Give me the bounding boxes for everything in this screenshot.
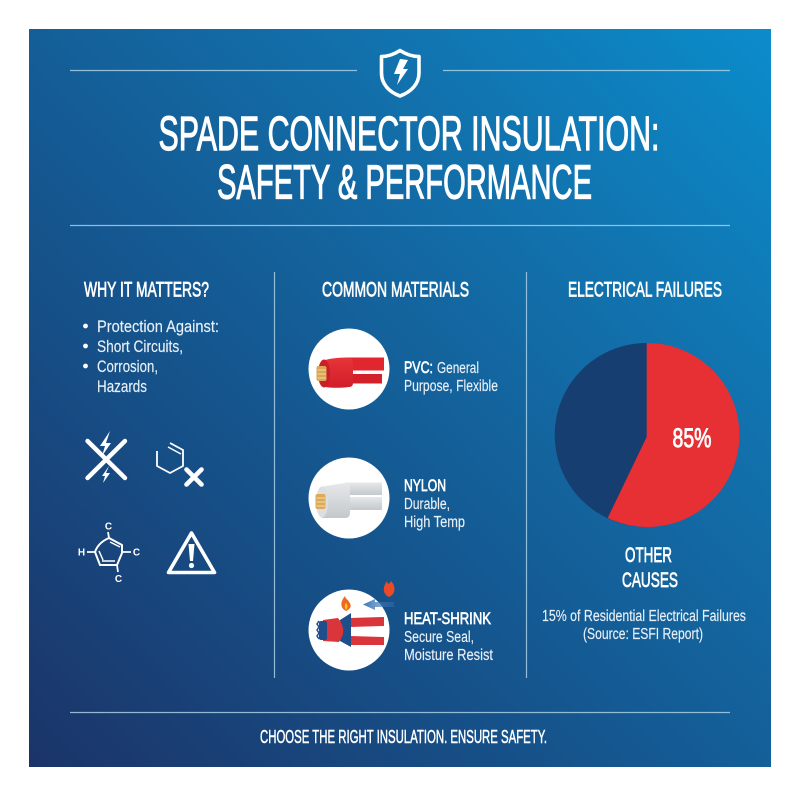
- icon: chemical ring: C: [105, 522, 112, 532]
- label: heat-shrink: Moisture Resist: [404, 647, 494, 664]
- icon: chemical ring: H: [78, 548, 85, 558]
- label: other causes: CAUSES: [622, 569, 678, 592]
- source note: 15% of Residential Electrical Failures: [542, 608, 746, 625]
- icon: warning triangle: [168, 533, 214, 572]
- label: nylon: Durable,: [404, 496, 450, 513]
- source note: (Source: ESFI Report): [583, 626, 703, 643]
- label: other causes: OTHER: [625, 544, 672, 567]
- icon: heat-shrink connector: [308, 590, 390, 670]
- icon: chemical ring: [78, 522, 140, 585]
- icon: shield with lightning bolt: [382, 50, 419, 96]
- material: nylon: [308, 458, 465, 538]
- label: heat-shrink: [404, 609, 494, 664]
- bullet list: protection: [83, 318, 219, 396]
- icon: flame on connector: [341, 596, 351, 611]
- label: nylon: NYLON: [404, 476, 446, 495]
- icon: flame and arrow: [363, 581, 395, 610]
- bullet list: protection: Corrosion,: [97, 358, 158, 376]
- heading: common materials: COMMON MATERIALS: [322, 278, 469, 302]
- icon: corrosion molecule with cross: [157, 443, 202, 484]
- icon: no short circuit: [88, 431, 125, 483]
- footer tagline: CHOOSE THE RIGHT INSULATION. ENSURE SAFETY.: [260, 726, 547, 747]
- bullet list: protection: Short Circuits,: [97, 338, 183, 356]
- label: other causes: [622, 544, 678, 592]
- pie chart: [555, 343, 739, 527]
- bullet list: protection: Protection Against:: [97, 318, 219, 336]
- label: heat-shrink: Secure Seal,: [404, 629, 474, 646]
- title: [158, 108, 660, 210]
- material: PVC: [308, 328, 498, 410]
- label: PVC: PVC:: [404, 358, 433, 377]
- label: nylon: [404, 476, 465, 531]
- icon: PVC connector: [308, 328, 390, 410]
- panel: electrical failures: [542, 278, 746, 643]
- heading: electrical failures: ELECTRICAL FAILURES: [568, 278, 722, 302]
- label: heat-shrink: HEAT-SHRINK: [404, 609, 491, 628]
- label: PVC: [404, 358, 498, 395]
- source note: [542, 608, 746, 643]
- label: PVC: Purpose, Flexible: [404, 378, 498, 395]
- icon: nylon connector: [308, 458, 390, 538]
- material: heat-shrink: [308, 581, 494, 670]
- pie chart: 85%: [672, 423, 712, 453]
- icon: chemical ring: C: [115, 574, 122, 585]
- panel: why it matters: [78, 278, 219, 585]
- icon: chemical ring: C: [133, 548, 140, 558]
- bullet list: protection: Hazards: [97, 378, 147, 396]
- heading: why it matters: WHY IT MATTERS?: [84, 278, 209, 302]
- label: nylon: High Temp: [404, 514, 465, 531]
- panel: common materials: [308, 278, 498, 670]
- label: PVC: General: [437, 360, 479, 377]
